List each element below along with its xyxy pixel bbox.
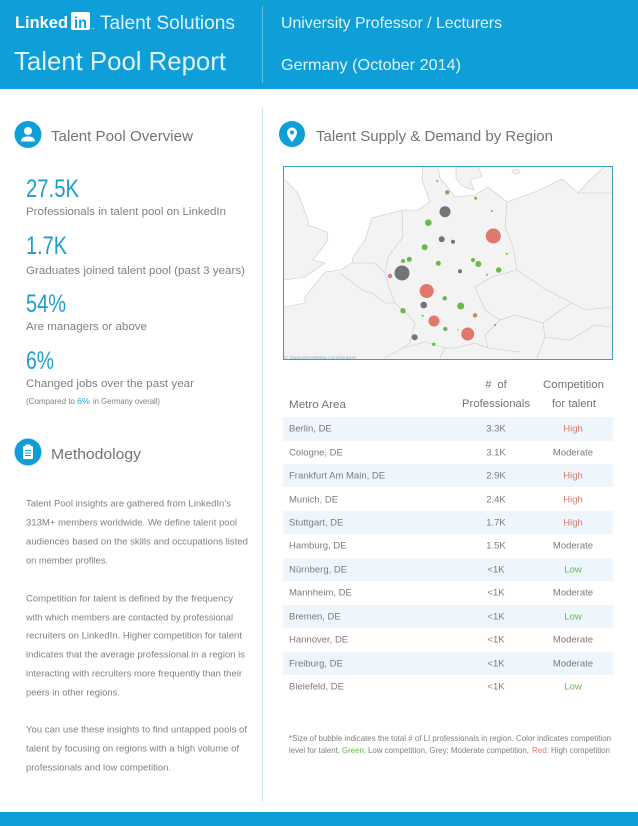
row: Hannover: <1K <box>487 634 505 646</box>
stat: talent pool size <box>26 175 226 218</box>
row: Mannheim: <1K <box>487 588 505 598</box>
stat: managers: 54% <box>26 290 66 318</box>
row: Frankfurt: High <box>563 470 583 482</box>
text: methodology body: interacting with recruiters more frequently than their <box>26 668 242 680</box>
row: Cologne: 3.1K <box>486 448 506 458</box>
footnote: level for talent. <box>289 745 340 755</box>
row: Munich: 2.4K <box>486 494 506 506</box>
row: Nurnberg: Low <box>564 564 582 576</box>
row: Hannover: Hannover, DE <box>289 634 348 646</box>
text: methodology body: You can use these insights to find untapped pools of <box>26 724 247 736</box>
header: role: University Professor / Lecturers <box>281 15 502 32</box>
logo: LinkedIn <box>15 12 94 32</box>
row: Nurnberg <box>289 564 582 576</box>
table header: Professionals <box>462 398 530 410</box>
heading: Talent Supply and Demand by Region: Talent Supply & Demand by Region <box>316 128 553 145</box>
footnote: Red: <box>532 745 549 755</box>
table header: Metro Area <box>289 399 347 411</box>
row: Berlin <box>289 424 583 434</box>
row: Bielefeld: Bielefeld, DE <box>289 682 344 692</box>
stat: changed jobs: Changed jobs over the past year <box>26 378 194 390</box>
text: methodology body: Competition for talent is defined by the frequency <box>26 594 233 604</box>
row: Nurnberg: Nürnberg, DE <box>289 564 347 576</box>
row: Berlin: 3.3K <box>486 424 506 434</box>
logo: LinkedIn: in <box>74 15 87 32</box>
heading: Talent Pool Overview: Talent Pool Overview <box>51 128 193 145</box>
stat: changed jobs: 6% <box>26 347 54 375</box>
row: Mannheim: Moderate <box>553 588 593 598</box>
table header: Competition <box>543 379 604 391</box>
text: methodology body: professionals and low competition. <box>26 762 171 774</box>
row: Berlin: High <box>563 424 583 434</box>
icon: map pin <box>279 121 305 147</box>
row: Hamburg: 1.5K <box>486 540 506 552</box>
footnote <box>289 733 611 755</box>
row: Stuttgart: Stuttgart, DE <box>289 518 343 528</box>
row: Bremen: Low <box>564 612 582 622</box>
stat: graduates <box>26 232 245 277</box>
stat: changed jobs <box>26 347 194 406</box>
header: location and date: Germany (October 2014) <box>281 57 461 74</box>
table header: for talent <box>552 398 596 410</box>
row: Freiburg: <1K <box>487 658 505 670</box>
row: Cologne: Moderate <box>553 448 593 458</box>
row: Munich: High <box>563 494 583 506</box>
bubbles: grey, moderate competition <box>394 206 462 340</box>
header band <box>0 0 638 89</box>
bubbles: green, low competition <box>400 180 508 346</box>
footnote: *Size of bubble indicates the total # of LI professionals in region. Color indicates competition <box>289 733 611 743</box>
row: Hamburg: Moderate <box>553 540 593 552</box>
row: Berlin: Berlin, DE <box>289 424 332 434</box>
row: Mannheim: Mannheim, DE <box>289 588 352 598</box>
row: Stuttgart <box>289 518 583 528</box>
row: Bremen <box>289 612 582 622</box>
text: methodology body: recruiters on LinkedIn. Higher competition for talent <box>26 630 242 642</box>
row: Munich: Munich, DE <box>289 494 338 506</box>
row: Nurnberg: <1K <box>487 564 505 576</box>
row: Freiburg: Freiburg, DE <box>289 658 343 670</box>
row: Bielefeld <box>289 682 582 692</box>
stat: talent pool size: 27.5K <box>26 175 79 203</box>
text: methodology body <box>25 498 248 774</box>
row: Hamburg <box>289 540 593 552</box>
table header <box>289 379 604 411</box>
row: Bielefeld: Low <box>564 682 582 692</box>
row: Cologne: Cologne, DE <box>289 448 343 458</box>
heading: Methodology: Methodology <box>51 446 142 463</box>
row: Freiburg <box>289 658 593 670</box>
header: Talent Solutions: Talent Solutions <box>100 13 235 34</box>
stat: changed jobs: (Compared to <box>26 396 75 406</box>
bubbles: red, high competition <box>388 228 501 340</box>
stat: managers: Are managers or above <box>26 321 147 333</box>
stat: changed jobs: 6% <box>77 396 90 406</box>
table: metro areas <box>283 379 613 692</box>
text: methodology body: 313M+ members worldwide. We define talent pool <box>26 518 237 528</box>
row: Bremen: Bremen, DE <box>289 612 341 622</box>
row: Mannheim <box>289 588 593 598</box>
text: methodology body: indicates that the average professional in a region is <box>26 650 245 660</box>
footnote: High competition <box>551 745 610 755</box>
row: Frankfurt: Frankfurt Am Main, DE <box>289 470 385 482</box>
stat: managers <box>26 290 147 333</box>
footnote: Low competition, Grey: Moderate competition, <box>368 745 529 755</box>
text: methodology body: peers in other regions. <box>26 688 120 698</box>
map attribution: © OpenStreetMap contributors <box>284 354 357 360</box>
icon: clipboard <box>14 438 42 466</box>
row: Bielefeld: <1K <box>487 682 505 692</box>
row: Bremen: <1K <box>487 612 505 622</box>
icon: person <box>14 121 42 148</box>
logo: LinkedIn: Linked <box>15 13 68 32</box>
text: methodology body: on member profiles. <box>26 556 108 566</box>
text: methodology body: talent by focusing on regions with a high volume of <box>26 744 239 754</box>
stat: changed jobs: in Germany overall) <box>93 396 160 406</box>
stat: graduates: 1.7K <box>26 232 67 260</box>
title: Talent Pool Report <box>14 46 227 76</box>
row: Hannover: Moderate <box>553 634 593 646</box>
table header: # of <box>485 379 508 391</box>
stat: talent pool size: Professionals in talent pool on LinkedIn <box>26 206 226 218</box>
row: Hannover <box>289 634 593 646</box>
text: methodology body: audiences based on the skills and occupations listed <box>26 536 248 548</box>
row: Freiburg: Moderate <box>553 658 593 670</box>
stat: graduates: Graduates joined talent pool (past 3 years) <box>26 265 245 277</box>
text: methodology body: Talent Pool insights are gathered from LinkedIn’s <box>26 498 231 510</box>
text: methodology body: with which members are contacted by professional <box>25 612 233 624</box>
footnote: Green: <box>342 745 366 755</box>
row: Stuttgart: High <box>563 518 583 528</box>
row: Frankfurt <box>289 470 583 482</box>
row: Hamburg: Hamburg, DE <box>289 540 347 552</box>
map: Germany bubble map <box>284 166 612 360</box>
row: Munich <box>289 494 583 506</box>
footer band <box>0 812 638 826</box>
row: Cologne <box>289 448 593 458</box>
row: Stuttgart: 1.7K <box>486 518 506 528</box>
row: Frankfurt: 2.9K <box>486 470 506 482</box>
